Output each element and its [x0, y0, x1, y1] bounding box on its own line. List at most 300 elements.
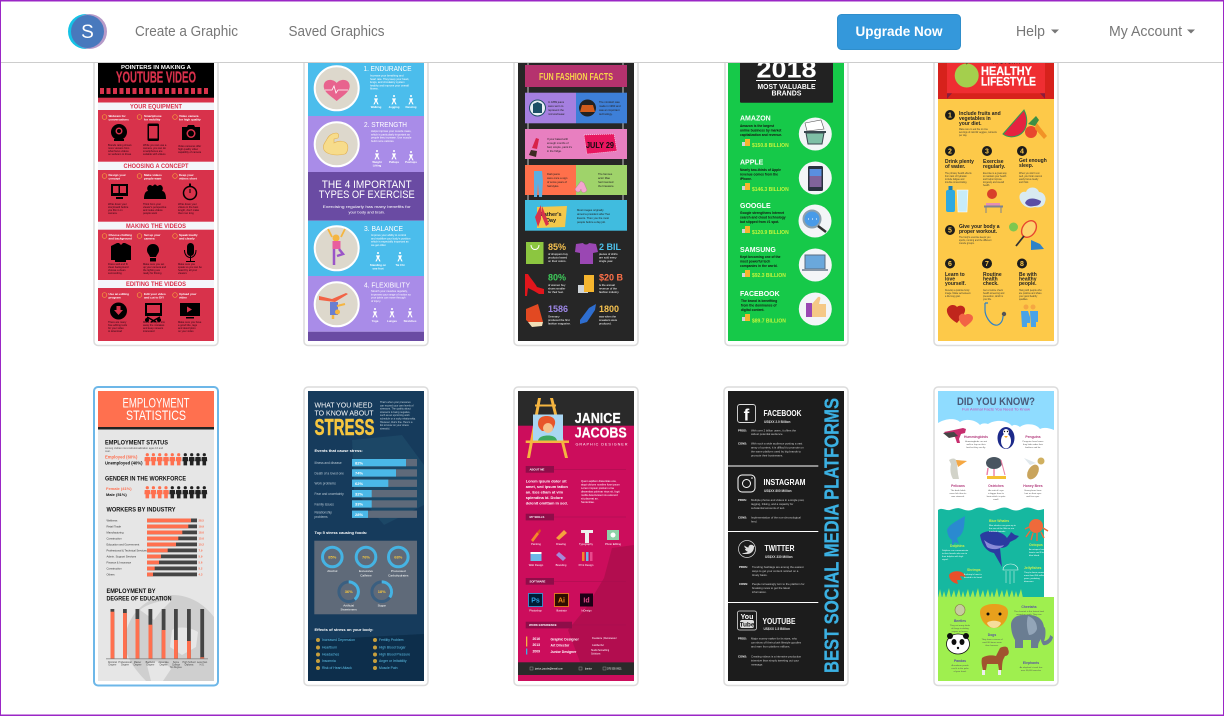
stress causing foods panel: [314, 530, 417, 614]
stress intro text: However, that's fine. Here's a: [380, 421, 413, 424]
stress causing foods panel: Excessive: [359, 569, 373, 573]
brand values: $89.7 BILLION: [752, 318, 786, 324]
fashion statistic captions: are sold every: [599, 256, 617, 260]
subtitle: Exercising regularly has many benefits for: [323, 204, 411, 209]
header: YouTube video title: POINTERS IN MAKING A: [121, 65, 191, 71]
fact board text: Dark jeans: [547, 172, 561, 176]
platform revenue: US$XX 800 Million: [764, 489, 792, 493]
step labels: Video camera: [179, 114, 199, 118]
numbered bullets: [945, 110, 1027, 268]
section headings: EDITING THE VIDEOS: [126, 282, 186, 288]
pros and cons text: [751, 428, 805, 666]
exercise body text and activity icons: Walking: [371, 105, 382, 109]
body copy: for your video: [108, 326, 124, 330]
tips headings: vegetables in: [959, 116, 991, 122]
coin icons: [742, 139, 750, 321]
workers by industry bar chart: Finance & Insurance: [106, 560, 132, 564]
employment status: EMPLOYMENT STATUS: [105, 440, 168, 446]
land section: smell 40 times more: [982, 641, 1003, 644]
fact board text: had invented: [598, 180, 614, 184]
body copy: the lighting are: [143, 268, 161, 272]
effects of stress list: Risk of Heart Attack: [322, 666, 352, 670]
pros and cons text: tagging, linking, and a capacity for: [751, 502, 793, 506]
fashion statistic captions: single year.: [599, 259, 613, 263]
step labels: Use an editing: [108, 292, 129, 296]
body copy: choose a clean: [108, 268, 126, 272]
brand values: [752, 143, 789, 324]
body copy: interested: [143, 329, 155, 333]
stress intro text: schedule or a rocky relationship.: [380, 418, 416, 420]
events that cause stress chart: 28%: [355, 512, 363, 517]
body copy: free editing tools: [108, 323, 128, 327]
about text: Lorem ipsum dolor sit: [526, 478, 567, 484]
stress causing foods panel: 18%: [378, 589, 386, 594]
skills icons: Painting: [531, 542, 541, 546]
brand descriptions: capitalization and revenue.: [740, 133, 782, 137]
events that cause stress chart: Fear and uncertainty: [314, 492, 344, 496]
work experience: Justified Art: [592, 644, 604, 647]
software icons: Id: [583, 598, 590, 604]
bird names and facts: they hide under their: [1023, 443, 1043, 446]
about text: splendina id. Dolore: [526, 495, 564, 500]
employment by education bar chart: Master: [134, 661, 141, 664]
land section: of your hand.: [954, 670, 967, 673]
body copy: Make sure you: [178, 262, 196, 266]
workers by industry bar chart: 28.5: [198, 518, 204, 522]
pros and cons text: With such a wide audience posting a vast: [751, 442, 803, 446]
work experience: [526, 636, 617, 656]
exercise body text and activity icons: we get older.: [371, 243, 386, 247]
stress causing foods panel: 76%: [362, 554, 370, 560]
nav link: saved graphics: Saved Graphics: [288, 24, 384, 40]
brand names: APPLE: [740, 160, 764, 166]
workers by industry bar chart: 5.2: [198, 566, 203, 570]
pros and cons labels: [738, 428, 748, 658]
pros and cons text: information.: [752, 590, 767, 594]
employment by education bar chart: DEGREE OF EDUCATION: [106, 596, 172, 602]
stress intro text: such as an upcoming work: [380, 414, 410, 417]
body copy: what focus videos: [108, 149, 129, 153]
platform icons: f: [744, 406, 750, 424]
pros and cons text: ways to get your content noticed on a: [752, 569, 799, 573]
exercise body text and activity icons: which is especially important as: [371, 240, 409, 244]
resume contact footer: 075 555 0921: [607, 668, 622, 670]
tips body text: are positive and share: [1019, 292, 1042, 295]
tips headings: your diet.: [959, 121, 982, 127]
body copy: Write down your: [108, 202, 127, 206]
software icons: Photoshop: [529, 608, 542, 612]
bird names and facts: Hummingbirds: [964, 435, 988, 439]
workers by industry bar chart: 7.9: [198, 548, 203, 552]
body copy: viewers: [178, 271, 187, 275]
employment by education bar chart: Bachelor: [146, 661, 155, 664]
body copy: and make videos: [143, 208, 163, 212]
gender in the workforce: [105, 477, 207, 498]
brand descriptions: iPhone.: [740, 177, 752, 181]
work experience: Solutions: [591, 652, 601, 656]
birds and insects section: [943, 427, 1044, 481]
account menu: My Account: [1109, 24, 1182, 40]
stress title: TO KNOW ABOUT: [314, 409, 374, 418]
step labels: for mobility: [144, 118, 161, 122]
fashion statistics: 1800: [599, 304, 619, 314]
tips headings: of water.: [945, 164, 966, 170]
fact board text: Most images originally: [577, 208, 604, 212]
exercise body text and activity icons: one foot: [372, 266, 384, 270]
employment by education bar chart: Degree: [134, 664, 142, 666]
brand names: SAMSUNG: [740, 247, 776, 254]
tips body text: Exercise is a great way: [983, 172, 1007, 175]
numbered bullets: 4: [1020, 148, 1024, 156]
pros and cons text: breaking news to get the latest: [752, 586, 790, 590]
bird names and facts: Hummingbirds can not: [965, 440, 987, 443]
body copy: to download: [108, 329, 123, 333]
brand descriptions: most powerful tech: [740, 260, 770, 264]
pros and cons labels: CONS:: [739, 582, 748, 586]
step labels: Speak loudly: [179, 233, 198, 237]
work experience: 2009: [532, 650, 540, 654]
employment status: Unemployed (40%): [105, 460, 143, 466]
fashion statistic captions: fashion magazine.: [548, 322, 571, 326]
fact board text: the brassiere.: [598, 184, 615, 188]
workers by industry bar chart: Retail Trade: [106, 524, 121, 528]
pros and cons text: People increasingly turn to the platform for: [752, 582, 805, 586]
fashion statistics: [548, 242, 624, 314]
employment by education bar chart: Doctoral: [108, 661, 117, 664]
pros and cons text: message.: [751, 662, 763, 666]
resume contact footer: [518, 662, 634, 675]
stress intro text: list to know on your stress: [380, 424, 410, 427]
section headings: CHOOSING A CONCEPT: [124, 164, 189, 170]
work experience: Junior Designer: [550, 650, 577, 654]
employment by education bar chart: College: [172, 664, 181, 666]
exercise body text and activity icons: your joints can move through: [371, 296, 406, 300]
about text: sit placerat an.: [581, 496, 599, 500]
land section: can fit in the palm: [951, 667, 969, 670]
did you know title: DID YOU KNOW?: [957, 396, 1035, 408]
bird names and facts: Honey bees have: [1024, 490, 1042, 492]
platform icons: You: [741, 614, 753, 621]
fact board text: Events. Then you the most: [577, 216, 609, 220]
body copy: and keep viewers: [143, 326, 164, 330]
fact board text: If your baked with: [547, 137, 569, 141]
effects of stress list: [314, 627, 410, 670]
logo: [68, 14, 107, 49]
exercise titles: [364, 66, 412, 290]
body copy: capability of camera: [178, 150, 202, 154]
body copy: There are many: [108, 320, 127, 324]
tips headings: Be with: [1019, 272, 1037, 278]
stress intro text: stressors. The quality about: [380, 408, 411, 411]
step labels: program: [108, 296, 121, 300]
step labels: people want: [144, 176, 161, 180]
exercise body text and activity icons: Stretches: [404, 319, 417, 323]
ocean section: blue blood.: [1029, 555, 1040, 557]
main title: [319, 179, 415, 201]
workers by industry bar chart: Professional & Technical Services: [106, 548, 147, 552]
easel portrait: [526, 398, 569, 458]
tips body text: per day.: [959, 134, 968, 137]
about text: Sententiae.: [581, 500, 595, 504]
pros and cons labels: PROS:: [738, 498, 747, 502]
brand values: $150.8 BILLION: [752, 143, 789, 149]
bird names and facts: and five eyes.: [1026, 496, 1040, 498]
workers by industry bar chart: Wellness: [106, 518, 118, 522]
tips headings: healthy: [1019, 276, 1037, 282]
pros and cons text: Major money-maker for its stars, who: [751, 636, 797, 640]
bird names and facts: own stomach.: [951, 495, 965, 498]
land section: Elephants: [1023, 661, 1039, 665]
numbered bullets: 7: [985, 261, 989, 268]
fashion statistics: 80%: [548, 273, 566, 283]
numbered bullets: 8: [1020, 261, 1024, 268]
employment status: Employed (60%): [105, 454, 138, 460]
bird names and facts: more fish than its: [950, 492, 967, 495]
fact board text: aimed a president after Two: [577, 212, 611, 216]
body copy: videos in the best: [178, 205, 198, 209]
body copy: viewer's perspective: [143, 205, 167, 209]
body copy: them too long: [178, 211, 194, 215]
body copy: Make sure you trim: [143, 320, 165, 324]
bird names and facts: Honey Bees: [1023, 484, 1043, 488]
ocean section: Octopus: [1029, 543, 1043, 547]
about text: atqui ultrices nomiles fuse ipsum: [581, 482, 621, 486]
events that cause stress chart: Events that cause stress:: [314, 448, 363, 453]
ocean section: Shrimps: [967, 568, 981, 572]
employment by education bar chart: High School: [183, 661, 196, 664]
step labels: for high quality: [179, 118, 201, 122]
section headings: YOUR EQUIPMENT: [130, 104, 182, 110]
employment by education bar chart: Degree: [146, 664, 155, 666]
bird names and facts: walk or hop on their: [966, 443, 986, 446]
exercise body text and activity icons: Dancing: [405, 105, 417, 109]
tips body text: your life.: [983, 298, 992, 301]
tips body text: well, your brain cannot: [1019, 175, 1042, 178]
land section: Cheetahs: [1021, 605, 1037, 609]
exercise body text and activity icons: Jogging: [389, 105, 400, 109]
step labels: Make videos: [144, 173, 162, 177]
employment by education bar chart: Some: [173, 661, 180, 664]
exercise body text and activity icons: fitness.: [370, 87, 379, 91]
stress intro text: That's when your pressures: [380, 401, 411, 404]
fact board text: were once a sign: [547, 176, 568, 180]
gender in the workforce: Female (41%): [106, 486, 132, 491]
workers by industry bar chart: Others: [106, 572, 115, 576]
icons: making and editing: [110, 243, 200, 322]
workers by industry bar chart: 5.6: [198, 560, 203, 564]
ocean section: years, predating: [1024, 577, 1040, 580]
workers by industry bar chart: Education and Government: [106, 542, 139, 546]
tips body text: to maintain your health: [983, 175, 1007, 178]
land section: Pandas: [954, 659, 966, 663]
bird names and facts: Penguins: [1025, 435, 1041, 439]
workers by industry bar chart: 19.9: [198, 524, 204, 528]
fashion statistic captions: Germany: [548, 314, 560, 318]
step labels: and clearly: [179, 236, 195, 240]
ocean section: Dolphins: [950, 544, 965, 548]
tips body text: When you don't rest: [1019, 172, 1040, 175]
body copy: suitable with videos: [143, 152, 166, 156]
pros and cons labels: CONS:: [738, 442, 747, 446]
step labels: Edit your video: [144, 292, 166, 296]
step labels: Webcam for: [108, 114, 126, 118]
platform names: INSTAGRAM: [764, 478, 806, 487]
workers by industry bar chart: Admin. Support Services: [106, 554, 137, 558]
tips body text: your good healthy: [1019, 295, 1038, 298]
platform revenue: [764, 420, 793, 631]
card: types of exercise infographic: [304, 50, 428, 346]
step labels: Smartphone: [144, 114, 162, 118]
fashion statistic captions: products based: [548, 256, 568, 260]
tips headings: Get enough: [1019, 158, 1047, 164]
exercise body text and activity icons: of injury.: [371, 299, 381, 303]
brand names: FACEBOOK: [740, 291, 780, 298]
tips headings: Exercise: [983, 159, 1004, 165]
pros and cons text: promote their businesses.: [751, 454, 783, 458]
fashion statistic captions: is the annual: [599, 283, 615, 287]
fact board text: enough months of: [547, 141, 569, 145]
bird names and facts: Ostriches: [988, 484, 1004, 488]
exercise body text and activity icons: heart rate. They keep your heart,: [370, 77, 409, 81]
fact board text: bad, simple, paint it's: [547, 145, 573, 149]
effects of stress list: Effects of stress on your body:: [314, 627, 373, 632]
body copy: Make sure you have: [178, 320, 202, 324]
tips headings: Learn to: [945, 272, 965, 278]
exercise body text and activity icons: Increase your breathing and: [370, 74, 404, 78]
land section: than humans.: [985, 644, 999, 647]
card: YouTube video infographic: [94, 50, 218, 346]
employment by education bar chart: [106, 589, 208, 669]
body copy: smartphones are: [143, 149, 163, 153]
ocean section: Blue whales can grow up to: [989, 524, 1017, 527]
resume name: GRAPHIC DESIGNER: [576, 443, 628, 447]
tips body text: and think.: [1019, 181, 1029, 184]
events that cause stress chart: 74%: [355, 471, 363, 476]
platform names: FACEBOOK: [764, 409, 802, 418]
body copy: storyboard before: [108, 205, 129, 209]
bird names and facts: hair on their eyes: [1025, 492, 1042, 495]
events that cause stress chart: Death of a loved one: [314, 471, 344, 475]
fact board text: people before a day job.: [577, 220, 606, 224]
card: best social media platforms infographic: [724, 387, 848, 686]
brand descriptions: Amazon is the largest: [740, 124, 775, 128]
tips body text: longevity and overall: [983, 181, 1004, 184]
card: 2018 most valuable brands infographic: [725, 50, 848, 346]
effects of stress list: Heartburn: [322, 646, 337, 650]
help menu: Help: [1016, 24, 1045, 40]
effects of stress list: High Blood Sugar: [379, 646, 406, 650]
exercise body text and activity icons: build more calories.: [371, 139, 395, 143]
fact board text: represent the: [548, 108, 564, 112]
sky and clouds: [938, 391, 1054, 430]
did you know title: [957, 396, 1035, 412]
step labels: and cut to DIY: [144, 296, 164, 300]
body copy: high quality video: [178, 147, 199, 151]
exercise body text and activity icons: Stretch your muscles regularly,: [371, 289, 408, 293]
card: stress infographic: [304, 387, 428, 686]
platform revenue: US$XX 330 Million: [765, 555, 793, 559]
workers by industry bar chart: [106, 508, 204, 576]
about text: delenit omittam in sed.: [526, 500, 568, 506]
stress causing foods panel: Carbohydrates: [388, 574, 409, 578]
pros and cons text: the same platform used by big brands to: [751, 450, 801, 454]
fashion statistics: 2 BIL: [599, 242, 622, 252]
step labels: Design your: [108, 173, 127, 177]
brand names: GOOGLE: [740, 203, 771, 210]
stress intro text: stressful.: [380, 427, 390, 430]
circles with exercise illustrations: [315, 66, 359, 326]
body copy: Dress well and fit: [108, 262, 128, 266]
ocean section: their dolphin with high: [942, 555, 964, 558]
fashion statistic captions: produced the first: [548, 318, 570, 322]
tips body text: The primary health effects: [945, 172, 972, 175]
work experience: 2013: [532, 643, 540, 647]
ocean section: [938, 508, 1049, 597]
employment header: [98, 391, 214, 430]
step labels: camera: [144, 236, 155, 240]
fact board text: actor Mae: [598, 176, 610, 180]
stress causing foods panel: Artificial: [343, 604, 354, 608]
tips body text: Hang with people who: [1019, 289, 1042, 292]
fact board text: The miniskirt was: [599, 100, 620, 104]
stress intro text: stressors is being negative,: [380, 411, 411, 414]
body copy: you film it on: [108, 208, 123, 212]
body copy: away the mistakes: [143, 323, 165, 327]
exercise body text and activity icons: and stabilize your body's position: [371, 236, 411, 240]
body copy: a good title, tags: [178, 323, 198, 327]
fashion statistics: 1586: [548, 304, 568, 314]
events that cause stress chart: Relationship: [314, 510, 332, 514]
body copy: Write down your: [178, 202, 197, 206]
brand descriptions: Google strengthens Internet: [740, 211, 785, 215]
skills icons: Typography: [579, 542, 594, 546]
brands title block: 2018: [756, 57, 816, 84]
healthy lifestyle header: LIFESTYLE: [981, 77, 1036, 89]
tips headings: Give your body a: [959, 224, 1000, 230]
stress title: WHAT YOU NEED: [314, 401, 373, 410]
ocean section: Jellyfishes: [1024, 566, 1041, 570]
tips body text: Get a routine check: [983, 289, 1004, 292]
body copy: speak so you can be: [178, 265, 202, 269]
step labels: Upload your: [179, 292, 197, 296]
fashion statistic captions: fashion industry.: [599, 290, 619, 294]
workers by industry bar chart: 5.9: [198, 554, 203, 558]
workers by industry bar chart: WORKERS BY INDUSTRY: [106, 508, 176, 514]
employment by education bar chart: Associate: [158, 661, 169, 664]
skills icons: [529, 529, 621, 567]
step labels: and background: [108, 236, 132, 240]
bird names and facts: brain which is quite: [987, 495, 1006, 498]
exercise body text and activity icons: Helps improve your muscle mass,: [371, 129, 412, 133]
section dividers: [728, 466, 818, 603]
workers by industry bar chart: Manufacturing: [106, 530, 124, 534]
fashion statistic captions: [548, 252, 619, 326]
banner: fun fashion facts: FUN FASHION FACTS: [539, 72, 613, 83]
bird names and facts: An ostrich's eye: [988, 489, 1004, 492]
pros and cons text: intensive than simply tweeting out your: [751, 658, 799, 662]
tips headings: regularly.: [983, 164, 1006, 170]
effects of stress list: High Blood Pressure: [379, 652, 410, 656]
brand icons: [798, 118, 832, 326]
tips body text: from lack of hydration: [945, 175, 968, 178]
fact board text: technology.: [599, 112, 613, 116]
ocean section: A shrimp's heart is: [964, 573, 983, 576]
tips body text: a life long goal.: [945, 296, 961, 298]
brand descriptions: search and cloud technology: [740, 216, 786, 220]
brands title block: BRANDS: [772, 90, 802, 98]
brand values: $120.9 BILLION: [752, 230, 789, 236]
pros and cons text: widest potential audience.: [751, 432, 783, 436]
